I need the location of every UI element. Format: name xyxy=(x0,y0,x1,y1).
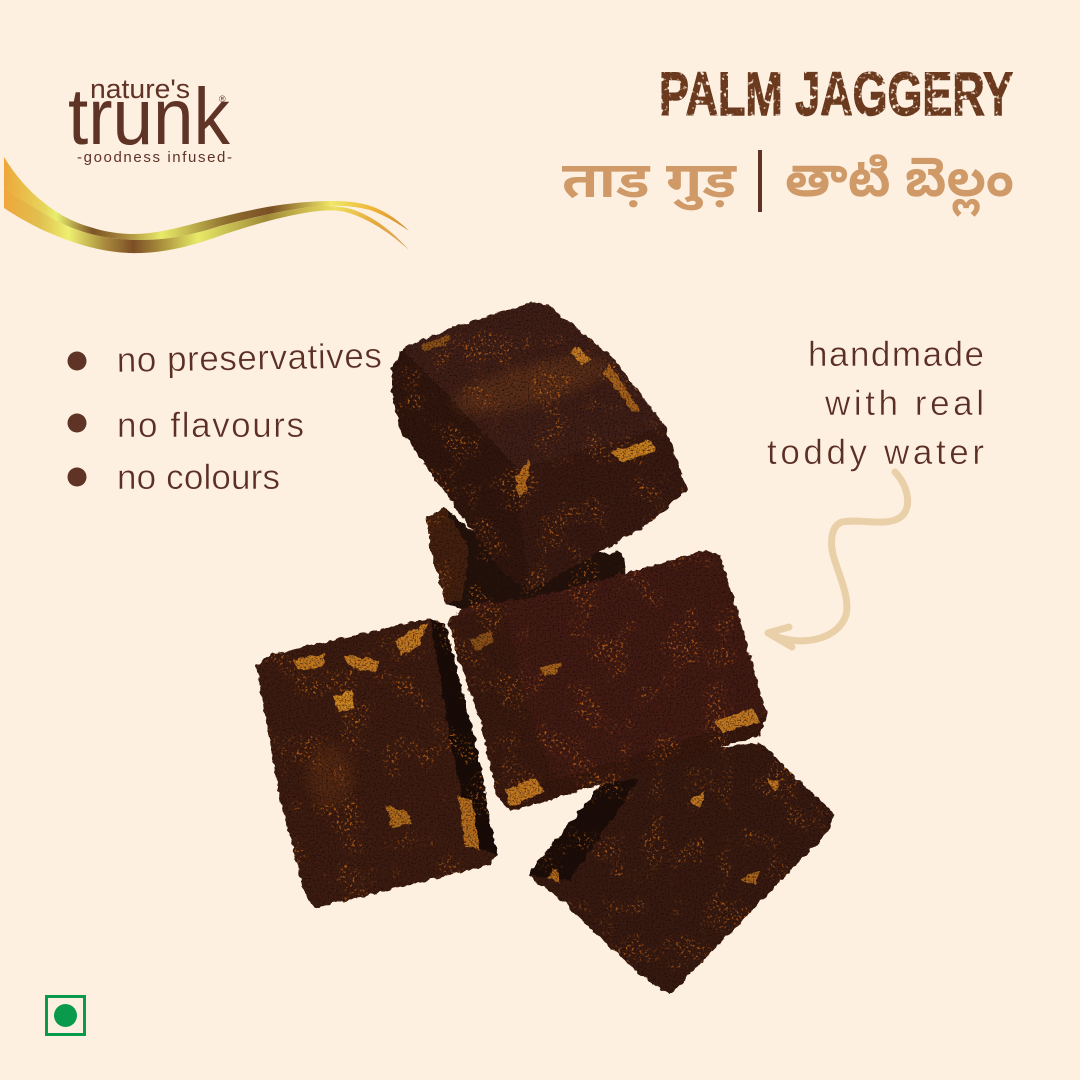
callout: handmade with real toddy water: with real xyxy=(824,384,984,423)
logo: nature's trunk: trunk xyxy=(68,72,231,161)
list: no additives: no colours xyxy=(117,458,280,497)
piece: centre xyxy=(448,550,767,812)
list: no additives: no preservatives xyxy=(116,336,382,380)
piece: bottom right xyxy=(528,743,835,995)
piece: left xyxy=(256,618,497,908)
list: no additives xyxy=(68,336,382,497)
logo: nature's trunk: nature's xyxy=(90,74,190,104)
piece: top xyxy=(392,303,688,590)
logo: nature's trunk: ® xyxy=(219,94,226,104)
arrow: callout to jaggery xyxy=(768,472,908,647)
logo: nature's trunk: -goodness infused- xyxy=(77,149,232,166)
subtitle: Telugu name: తాటి బెల్లం xyxy=(785,148,1014,217)
callout: handmade with real toddy water xyxy=(767,335,984,472)
callout: handmade with real toddy water: toddy water xyxy=(767,433,984,472)
golden ribbon swoosh xyxy=(4,157,409,253)
jaggery pieces photo xyxy=(256,303,835,995)
icon: vegetarian mark xyxy=(46,996,84,1034)
callout: handmade with real toddy water: handmade xyxy=(808,335,984,374)
piece: back xyxy=(426,507,626,612)
list: no additives: no flavours xyxy=(117,406,304,445)
subtitle: Hindi name: ताड़ गुड़ xyxy=(562,152,738,212)
divider between scripts xyxy=(758,150,762,212)
